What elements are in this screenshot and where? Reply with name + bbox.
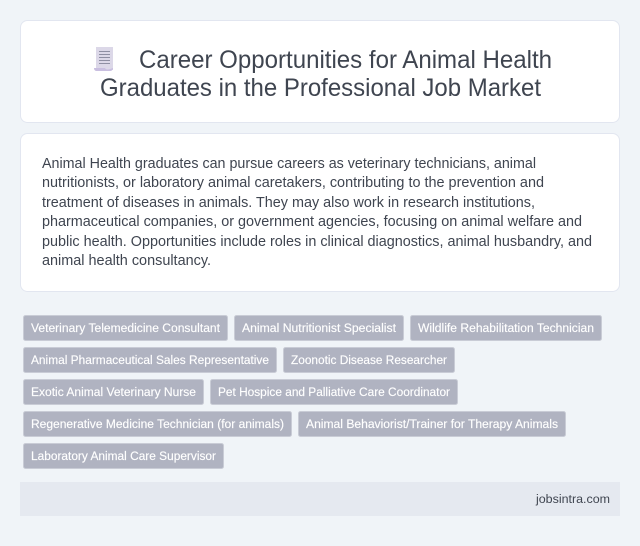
tag: Zoonotic Disease Researcher: Zoonotic Disease Researcher (291, 353, 447, 367)
tag: Zoonotic Disease Researcher (284, 348, 454, 372)
text block: description: Animal Health graduates can pursue careers as veterinary technicians, animal (42, 156, 536, 172)
tag: Pet Hospice and Palliative Care Coordinator: Pet Hospice and Palliative Care Coordinator (218, 385, 450, 399)
tag: Animal Pharmaceutical Sales Representative (24, 348, 276, 372)
text block: description (42, 156, 592, 269)
tag: Veterinary Telemedicine Consultant (24, 316, 228, 340)
tag: Animal Behaviorist/Trainer for Therapy Animals: Animal Behaviorist/Trainer for Therapy Animals (306, 417, 558, 431)
tag: Animal Nutritionist Specialist (234, 316, 404, 340)
text block: description: animal health consultancy. (42, 253, 211, 269)
tag: Animal Behaviorist/Trainer for Therapy Animals (298, 412, 566, 436)
panel: description (20, 134, 620, 292)
tag: Laboratory Animal Care Supervisor: Laboratory Animal Care Supervisor (31, 449, 216, 463)
tag: Exotic Animal Veterinary Nurse: Exotic Animal Veterinary Nurse (31, 385, 196, 399)
text block: description: nutritionists, or laboratory animal caretakers, contributing to the prevention and (42, 175, 544, 191)
title (100, 46, 552, 102)
tag: Veterinary Telemedicine Consultant: Veterinary Telemedicine Consultant (31, 321, 221, 335)
tag: Animal Nutritionist Specialist: Animal Nutritionist Specialist (242, 321, 397, 335)
tag: Laboratory Animal Care Supervisor (24, 444, 224, 468)
tag: Wildlife Rehabilitation Technician: Wildlife Rehabilitation Technician (418, 321, 594, 335)
tag: Regenerative Medicine Technician (for animals) (24, 412, 292, 436)
text block: description: pharmaceutical companies, or government agencies, focusing on animal welfare and (42, 214, 582, 230)
footer: jobsintra.com (535, 492, 610, 506)
tag: Animal Pharmaceutical Sales Representative: Animal Pharmaceutical Sales Representative (31, 353, 269, 367)
title: Career Opportunities for Animal Health (139, 46, 552, 74)
footer (20, 482, 620, 516)
tag list (24, 316, 602, 468)
tag: Exotic Animal Veterinary Nurse (24, 380, 204, 404)
panel: title card (20, 20, 620, 122)
tag: Regenerative Medicine Technician (for animals): Regenerative Medicine Technician (for animals) (31, 417, 284, 431)
text block: description: public health. Opportunities include roles in clinical diagnostics, animal husbandry, and (42, 234, 592, 250)
tag: Wildlife Rehabilitation Technician (410, 316, 602, 340)
title: Graduates in the Professional Job Market (100, 74, 541, 102)
icon: document scroll (94, 47, 113, 71)
text block: description: treatment of diseases in animals. They may also work in research institutions, (42, 195, 535, 211)
tag: Pet Hospice and Palliative Care Coordinator (210, 380, 458, 404)
